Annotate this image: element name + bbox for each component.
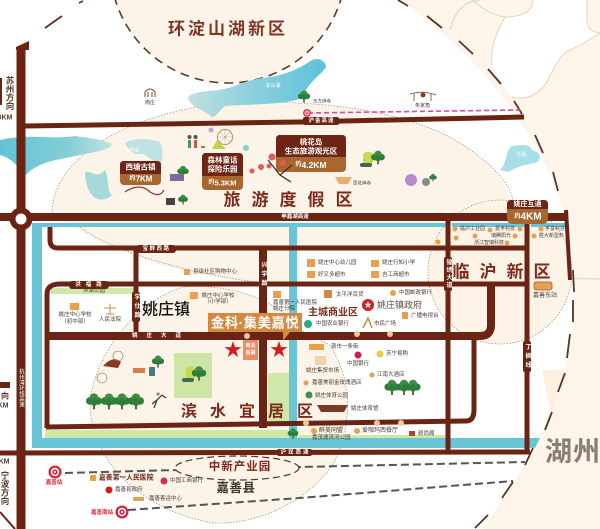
region: 旅游度假区 [52,102,513,285]
poi: 姚庄中心幼儿园: 姚庄中心幼儿园 [318,258,357,266]
label: 丁枫线 [523,341,531,372]
direction label: 宁波方向: 宁波方向 [0,470,10,506]
icon: 莲花禅寺 [335,177,371,186]
poi: 广播电视台: 广播电视台 [411,311,439,319]
region: 临沪新区 [428,200,572,344]
icon: tree group east [360,151,385,167]
poi: 初中部 [58,303,92,325]
poi: 吉工商超市 [371,270,410,278]
heading: 姚庄镇: 姚庄镇 [142,300,190,318]
poi: 第一人民医院姚庄分院 [273,291,318,312]
lake: west river [0,136,112,175]
outer region: right side beyond the ring [398,0,600,529]
rail lines [65,110,525,510]
poi: 好又多超市: 好又多超市 [318,270,346,278]
info card: 桃花岛生态旅游观光区 [276,135,346,172]
lake: 汾湖 [500,145,540,172]
top landmarks [145,89,436,117]
poi: 滨湖公园: 滨湖公园 [83,286,105,294]
poi: 县级社区购物中心: 县级社区购物中心 [193,267,238,275]
icon: bird and ribbon [97,351,123,383]
icon: bench and palm [133,355,164,376]
icon: children [188,135,205,148]
poi: 县级社区购物中心 [184,267,238,275]
poi: 初中部: 姚庄中心学校 [58,310,92,318]
heading: 主城商业区: 主城商业区 [308,306,358,318]
poi: 姚庄行知小学: 姚庄行知小学 [382,258,416,266]
heading: 旅游度假区: 旅游度假区 [224,190,364,210]
region: 中新产业园 [175,456,299,480]
top landmarks: 朱家角 [415,102,430,109]
info card: 姚庄互通 [507,199,548,224]
points of interest: 临沪新区: 浙江智瑞科技 [474,239,504,246]
direction label: 宁波方向 [0,382,10,506]
poi: 嘉善第一人民医院 [90,472,154,482]
label: 沪金高速 [303,116,339,125]
icon: palms and house [170,166,189,181]
label: 宝群西路 [136,244,176,253]
lake: 淀山湖 [188,59,326,117]
info card: 西塘古镇 [120,161,161,185]
info card: 西塘古镇: 约7KM [130,174,153,184]
poi: 苏宁易购 [376,349,409,358]
poi: 太平洋百货: 太平洋百货 [336,290,364,298]
poi: 小学部: （小学部） [204,297,232,305]
icon: garden scene [125,187,188,205]
poi: 中国工商银行: 中国工商银行 [170,476,204,484]
poi: 中国农业银行 [304,319,350,328]
region: town centre living area [90,286,347,523]
poi: 第一人民医院姚庄分院: 姚庄分院 [273,304,296,312]
label: 沪昆高速 [277,448,312,456]
poi: 中国银行 [347,352,369,367]
icon: tree row [86,393,144,409]
poi: 夜市一条街 [309,342,359,350]
info card: 桃花岛生态旅游观光区: 约4.2KM [295,160,327,170]
park illustration [86,351,212,409]
region: 环淀山湖新区 [110,0,346,83]
info card: 姚庄互通: 姚庄互通 [514,199,542,208]
poi: 姚庄体育公园 [306,391,349,399]
info card: 森林童话探险乐园: 森林童话 [208,154,238,164]
label: road markers [244,331,404,426]
info card: 桃花岛生态旅游观光区: 桃花岛 [300,136,323,146]
info card: 西塘古镇: 西塘古镇 [126,162,156,172]
heading: 临沪新区: 临沪新区 [452,262,560,282]
icon: star: ★ [224,340,242,360]
info card: 森林童话探险乐园: 约5.3KM [208,178,237,188]
icon: park trees [182,366,206,382]
poi: 姚庄集贸市场 [306,356,340,374]
label: 申嘉湖高速: 申嘉湖高速 [281,212,309,220]
label: 洪福路 [69,280,109,289]
label: 商业金融: 商业 [245,342,256,349]
icon: star: ★ [270,340,288,360]
poi: 姚庄体育公园: 姚庄体育公园 [315,391,349,399]
lakes: 淀山湖 [265,82,281,89]
info card: 桃花岛生态旅游观光区: 生态旅游观光区 [285,146,338,156]
poi: 爱咖玛西餐厅 [354,426,398,434]
label: 宝群西路: 宝群西路 [142,244,171,252]
label: 锦绣大道 [444,257,452,291]
project marker [208,313,302,360]
icon: 嘉善南站: 嘉善南站 [91,508,113,516]
icon: jogger [152,392,166,408]
icon: 嘉善南站 [91,506,128,518]
poi: 吉工商超市: 吉工商超市 [382,270,410,278]
poi: 嘉茂德滨河公园: 嘉茂德滨河公园 [312,433,351,441]
points of interest: 临沪新区: 孚富科技 [545,225,565,232]
points of interest: town [58,258,439,441]
heading: 湖州: 湖州 [545,437,600,467]
heading: 嘉善县: 嘉善县 [216,480,256,495]
icon: 姚庄镇政府: 姚庄镇政府 [377,299,422,310]
heading: 滨水宜居区: 滨水宜居区 [181,402,326,420]
points of interest: 嘉善 [46,466,204,518]
poi: 小学部 [190,291,235,305]
lakes: 汾湖 [516,151,526,158]
poi: 姚庄体育馆 [317,404,379,412]
points of interest: 临沪新区: 临沪工业园 [460,225,485,232]
label: 学仕路: 学仕路 [133,293,140,320]
poi: 苏宁易购: 苏宁易购 [386,349,409,357]
poi: 姚庄中心幼儿园 [307,258,357,267]
points of interest: 临沪新区 [436,225,565,299]
poi: 中国工商银行 [160,476,204,484]
poi: 人民法院: 人民法院 [99,315,121,323]
points of interest: 临沪新区: 胜大新型料 [539,232,564,239]
label: 锦绣大道: 锦绣大道 [445,258,452,289]
road labels [18,116,531,456]
poi: 第一人民医院姚庄分院: 嘉善第一人民医院 [273,298,318,306]
points of interest: 临沪新区: 瑞腾阳光 [491,232,511,239]
poi: 好又多超市 [307,270,346,278]
icon: 嘉善站 [46,466,63,486]
poi: 小学部: 姚庄中心学校 [201,291,235,299]
icon: 嘉善站: 嘉善站 [46,478,63,486]
points of interest: 临沪新区: 嘉孚科技 [495,225,515,232]
poi: 姚庄行知小学 [371,258,416,267]
poi: 嘉茂德滨河公园 [288,428,351,441]
poi: 嘉善第一人民医院: 嘉善第一人民医院 [99,472,154,482]
top landmarks: 南庄 [145,99,155,106]
label: 洪福路: 洪福路 [75,280,107,288]
icon: ferris wheel [212,130,232,149]
lakes: 福林湖 [125,146,139,154]
info card: 森林童话探险乐园: 探险乐园 [208,164,238,174]
poi: 夜市一条街: 夜市一条街 [331,342,359,350]
poi: 江南大酒店 [370,370,405,378]
icon: 姚庄镇政府: ★ [364,300,372,310]
icon: map pins [208,128,249,151]
poi: 姚庄集贸市场: 姚庄集贸市场 [306,366,340,374]
icon: flowers [405,174,437,186]
direction label: 宁波方向: 向 [1,390,9,400]
icon: 莲花禅寺: 莲花禅寺 [353,180,371,186]
icon: peach blossom branch [250,154,292,182]
poi: 市民广场: 市民广场 [374,319,397,327]
icon: trees [298,90,310,103]
tourist illustrations [125,128,437,205]
poi: 中国农业银行: 中国农业银行 [316,319,350,327]
label: 商业金融: 金融 [245,349,256,356]
poi: 嘉善客运中心 [133,494,183,502]
label: 金科·集美嘉悦: 金科·集美嘉悦 [211,314,299,330]
white block: town centre north [300,250,445,283]
poi: 爱咖玛西餐厅: 爱咖玛西餐厅 [362,426,398,434]
region: 中新产业园: 中新产业园 [209,459,271,473]
direction label: 苏州方向 [0,75,15,122]
poi: 中国邮政银行: 中国邮政银行 [399,288,433,296]
poi: 中国邮政银行 [390,288,433,296]
canal [32,223,565,448]
poi: 醉美同盟: 醉美同盟 [319,426,343,434]
poi: 嘉善县政府 [106,485,143,494]
poi: 广播电视台 [402,311,439,319]
icon: 姚庄镇政府 [362,299,422,311]
heading: 环淀山湖新区: 环淀山湖新区 [168,18,288,38]
label: 杭州湾环线高速: 杭州湾环线高速 [18,368,25,409]
lakes [0,59,540,200]
poi: 中国银行: 中国银行 [347,359,369,367]
icon: 嘉善东站: 嘉善东站 [533,291,557,299]
lake: south water [85,170,112,200]
icon: rail station [303,109,311,117]
park block [174,353,212,398]
info card: 森林童话探险乐园 [202,153,243,190]
poi: 太平洋百货 [324,290,364,298]
poi: 嘉善客运中心: 嘉善客运中心 [149,494,183,502]
label: 姚庄大道: 姚庄大道 [132,331,190,339]
poi: 市民广场 [363,318,397,328]
direction label: 苏州方向: 苏州方向 [5,75,15,111]
poi: 嘉善美丽金玫瑰酒店: 嘉善美丽金玫瑰酒店 [312,378,362,386]
lake: 西塘 water [125,139,163,165]
icon: 朱家角 [410,92,436,101]
icon: trees east [384,380,421,395]
poi: 醉美同盟 [311,426,343,434]
poi: 嘉善美丽金玫瑰酒店 [304,378,362,386]
poi: 嘉善县政府: 嘉善县政府 [115,485,143,493]
poi: 初中部: （初中部） [61,317,89,325]
poi: 姚庄体育馆: 姚庄体育馆 [351,404,379,412]
green strips [45,288,447,438]
poi: 颜尚阁: 颜尚阁 [418,429,435,437]
label: 学仕路 [132,292,140,322]
label: 商业金融 [243,340,258,360]
label: 兴学路: 兴学路 [260,261,267,288]
label: 沪金高速: 沪金高速 [308,116,335,124]
text: 东方雪寺: 东方佛寺 [313,98,331,104]
poi: 人民法院 [99,304,121,323]
label: 沪昆高速: 沪昆高速 [280,448,311,456]
poi: 颜尚阁 [409,429,435,437]
poi: 江南大酒店: 江南大酒店 [377,370,405,378]
info card: 姚庄互通: 约4KM [514,212,542,222]
label: 丁枫线: 丁枫线 [524,344,531,370]
icon: 南庄 [145,89,155,97]
